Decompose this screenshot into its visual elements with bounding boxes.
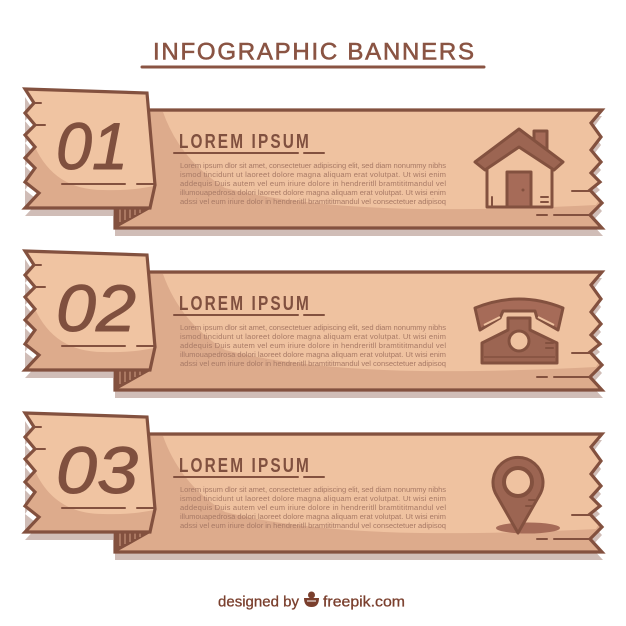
body text: Lorem ipsum dlor sit amet, consectetuer adipiscing elit, sed diam nonummy nibhs <box>180 161 446 170</box>
body text: illumouapedrosa dolori laoreet dolore magna aliquam erat volutpat. Ut wisi enim <box>180 188 446 197</box>
body text: Lorem ipsum dlor sit amet, consectetuer adipiscing elit, sed diam nonummy nibhs <box>180 485 446 494</box>
footer credit: designed by <box>218 594 300 610</box>
body text: adssi vel eum iriure dolor in hendreritll bramtititmandul vel consectetuer adipisoq <box>180 359 446 368</box>
body text: ismod tincidunt ut laoreet dolore magna aliquam erat volutpat. Ut wisi enim <box>180 494 446 503</box>
icon: freepik logo <box>304 592 319 607</box>
ribbon: main strip <box>115 434 603 560</box>
body text: illumouapedrosa dolori laoreet dolore magna aliquam erat volutpat. Ut wisi enim <box>180 512 446 521</box>
banner 3 <box>25 413 603 560</box>
ribbon: main strip <box>115 110 603 236</box>
body text: adssi vel eum iriure dolor in hendreritll bramtititmandul vel consectetuer adipisoq <box>180 197 446 206</box>
ribbon: main strip <box>115 272 603 398</box>
body text <box>180 161 446 206</box>
footer credit <box>218 592 405 610</box>
body text: ismod tincidunt ut laoreet dolore magna aliquam erat volutpat. Ut wisi enim <box>180 170 446 179</box>
number 02: 02 <box>56 271 136 345</box>
flag <box>25 251 155 378</box>
title: INFOGRAPHIC BANNERS <box>153 38 474 66</box>
ribbon: fold <box>115 533 150 551</box>
heading: LOREM IPSUM <box>179 292 309 315</box>
body text <box>180 485 446 530</box>
body text <box>180 323 446 368</box>
ribbon: fold <box>115 209 150 227</box>
footer credit: freepik.com <box>323 594 405 610</box>
heading: LOREM IPSUM <box>179 130 309 153</box>
number 01: 01 <box>56 109 128 183</box>
flag <box>25 89 155 216</box>
icon: house <box>475 129 563 207</box>
flag <box>25 413 155 540</box>
body text: Lorem ipsum dlor sit amet, consectetuer adipiscing elit, sed diam nonummy nibhs <box>180 323 446 332</box>
body text: addequis Duis autem vel eum iriure dolore in hendreritll bramtititmandul vel <box>180 503 446 512</box>
ribbon: fold <box>115 371 150 389</box>
body text: addequis Duis autem vel eum iriure dolore in hendreritll bramtititmandul vel <box>180 179 446 188</box>
heading: LOREM IPSUM <box>179 454 309 477</box>
body text: addequis Duis autem vel eum iriure dolore in hendreritll bramtititmandul vel <box>180 341 446 350</box>
body text: ismod tincidunt ut laoreet dolore magna aliquam erat volutpat. Ut wisi enim <box>180 332 446 341</box>
banner 2 <box>25 251 603 398</box>
body text: adssi vel eum iriure dolor in hendreritll bramtititmandul vel consectetuer adipisoq <box>180 521 446 530</box>
number 03: 03 <box>56 433 138 507</box>
icon: telephone <box>475 299 563 363</box>
body text: illumouapedrosa dolori laoreet dolore magna aliquam erat volutpat. Ut wisi enim <box>180 350 446 359</box>
banner 1 <box>25 89 603 236</box>
icon: map pin <box>493 457 560 534</box>
